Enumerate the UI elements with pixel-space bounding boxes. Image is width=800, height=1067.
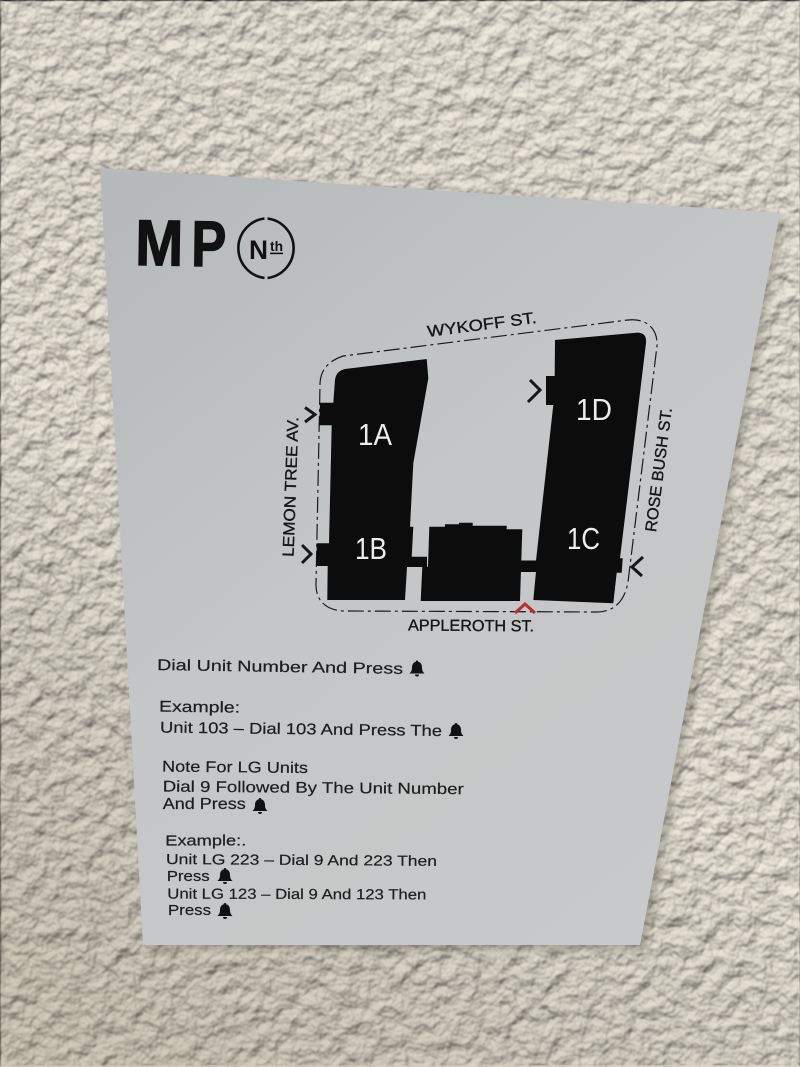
- site map: [281, 310, 676, 635]
- logo circle badge: [238, 218, 294, 278]
- note for LG units: Note For LG Units: [162, 759, 308, 777]
- logo circle badge: N: [249, 235, 268, 265]
- instruction line: [157, 657, 424, 678]
- first example: Example:: [159, 699, 240, 717]
- central building: [421, 523, 522, 601]
- LG examples: Example:.: [165, 834, 246, 850]
- entrance arrow 1B: [302, 545, 311, 563]
- note for LG units: [162, 759, 464, 814]
- logo circle badge: th: [270, 238, 283, 254]
- note for LG units: Dial 9 Followed By The Unit Number: [163, 779, 464, 798]
- logo wordmark MP: P: [191, 207, 227, 280]
- LG examples: Press: [168, 903, 211, 919]
- street label Rose Bush St.: ROSE BUSH ST.: [643, 407, 676, 533]
- street label Appleroth St.: APPLEROTH ST.: [408, 618, 534, 635]
- panel: sign plate: [100, 168, 785, 950]
- entrance arrow 1D: [528, 380, 540, 402]
- building 1A and 1B: [317, 359, 428, 600]
- unit label 1A: 1A: [358, 417, 392, 452]
- entrance arrow 1C: [632, 557, 643, 576]
- instruction line: Dial Unit Number And Press: [157, 657, 403, 678]
- unit label 1B: 1B: [355, 531, 387, 566]
- LG examples: Unit LG 223 – Dial 9 And 223 Then: [166, 852, 437, 870]
- instructions text block: [157, 657, 464, 919]
- building 1C and 1D: [533, 333, 646, 603]
- LG examples: [165, 834, 437, 919]
- street label Wykoff St.: WYKOFF ST.: [426, 310, 538, 341]
- first example: [159, 699, 464, 740]
- logo wordmark MP: M: [135, 206, 184, 280]
- unit label 1C: 1C: [567, 521, 600, 556]
- main entrance arrow red: [515, 604, 535, 613]
- logo wordmark MP: [135, 206, 227, 280]
- unit label 1D: 1D: [576, 392, 612, 427]
- street label Lemon Tree Av.: LEMON TREE AV.: [281, 417, 302, 557]
- entrance arrow 1A: [305, 408, 315, 422]
- connector between central building and 1C: [519, 560, 539, 572]
- LG examples: Press: [167, 869, 210, 885]
- first example: Unit 103 – Dial 103 And Press The: [160, 720, 442, 740]
- logo: MP Nth: [135, 206, 294, 280]
- property boundary dashed line: [316, 320, 657, 612]
- LG examples: Unit LG 123 – Dial 9 And 123 Then: [167, 887, 426, 903]
- note for LG units: And Press: [163, 796, 246, 813]
